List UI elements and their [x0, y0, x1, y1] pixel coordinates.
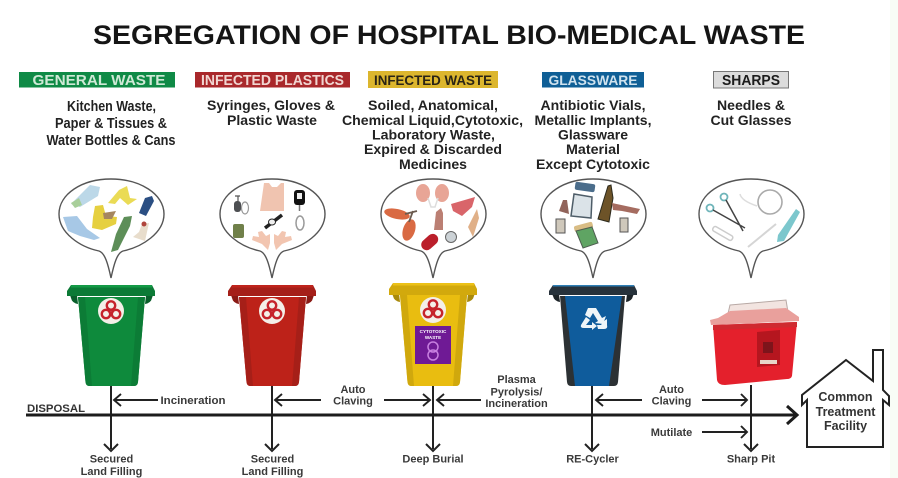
disposal stem: sharp pit [744, 385, 758, 451]
arrow: auto claving between red and yellow: Auto [340, 384, 366, 396]
description: infected waste: Laboratory Waste, [372, 126, 495, 142]
icon: biohazard [424, 300, 442, 317]
description: general waste: Paper & Tissues & [55, 115, 167, 132]
speech bubble: glassware items [541, 179, 646, 278]
label: sharps: SHARPS [722, 73, 780, 89]
arrow: auto claving between blue and sharps: Claving [652, 396, 691, 408]
label: secured land filling [81, 454, 142, 478]
label: infected waste: INFECTED WASTE [374, 72, 492, 88]
description: sharps: Cut Glasses [710, 112, 792, 128]
arrow: plasma pyrolysis incineration: Plasma [497, 374, 537, 386]
column: infected waste [342, 71, 523, 466]
description: sharps: Needles & [717, 97, 785, 113]
description: glassware: Metallic Implants, [534, 112, 652, 128]
disposal stem: re-cycler [585, 386, 599, 451]
speech bubble: anatomical waste items [381, 179, 486, 278]
icon: biohazard [102, 301, 120, 318]
description: glassware [534, 97, 652, 172]
column: infected plastics [195, 72, 350, 478]
cytotoxic waste sign: WASTE [425, 335, 441, 340]
description: glassware: Glassware [558, 126, 628, 142]
description: sharps [710, 97, 792, 128]
label: disposal: DISPOSAL [27, 403, 85, 415]
description: infected plastics: Syringes, Gloves & [207, 97, 335, 113]
disposal stem: deep burial [426, 386, 440, 451]
speech bubble: general waste items [59, 179, 164, 278]
description: glassware: Material [566, 141, 620, 157]
description: infected plastics [207, 97, 335, 128]
arrow: mutilate [651, 426, 747, 439]
sharps container [710, 300, 799, 385]
label: secured land filling [242, 454, 303, 478]
label: secured land filling: Secured [251, 454, 294, 466]
common treatment facility house [802, 350, 889, 447]
label: secured land filling: Land Filling [242, 466, 303, 478]
bin: blue [549, 285, 637, 386]
icon: biohazard [263, 301, 281, 318]
label: secured land filling: Secured [90, 454, 133, 466]
cytotoxic waste sign: CYTOTOXIC [420, 329, 447, 334]
common treatment facility house: Facility [824, 419, 867, 433]
description: infected waste: Medicines [399, 156, 467, 172]
arrow: plasma pyrolysis incineration: Pyrolysis/ [491, 386, 542, 398]
description: general waste [46, 98, 176, 149]
label: general waste: GENERAL WASTE [32, 72, 166, 89]
label: infected plastics: INFECTED PLASTICS [201, 73, 344, 89]
description: infected waste: Chemical Liquid,Cytotoxic, [342, 112, 523, 128]
column: sharps [699, 72, 804, 466]
disposal axis [26, 406, 797, 424]
description: infected waste: Soiled, Anatomical, [368, 97, 498, 113]
arrow: auto claving between red and yellow [275, 384, 430, 408]
description: infected waste: Expired & Discarded [364, 141, 502, 157]
arrow: auto claving between blue and sharps [596, 384, 747, 408]
speech bubble: infected plastic items [220, 179, 325, 278]
description: glassware: Antibiotic Vials, [540, 97, 646, 113]
arrow: plasma pyrolysis incineration [437, 374, 548, 410]
common treatment facility house: Common [818, 390, 873, 404]
bin: green [67, 285, 155, 386]
column: glassware [534, 72, 652, 466]
description: general waste: Water Bottles & Cans [46, 132, 176, 149]
disposal stem: secured land filling [104, 386, 118, 451]
arrow: mutilate: Mutilate [651, 427, 692, 439]
description: infected plastics: Plastic Waste [227, 112, 317, 128]
disposal stem: secured land filling [265, 386, 279, 451]
label: sharp pit: Sharp Pit [727, 454, 775, 466]
common treatment facility house: Treatment [816, 405, 876, 419]
icon: recycle [581, 308, 607, 330]
bin: red [228, 285, 316, 386]
arrow: auto claving between blue and sharps: Auto [659, 384, 684, 396]
description: infected waste [342, 97, 523, 172]
label: re-cycler: RE-Cycler [566, 454, 620, 466]
description: general waste: Kitchen Waste, [67, 98, 156, 115]
arrow: plasma pyrolysis incineration: Incineration [485, 398, 548, 410]
bin: yellow [389, 283, 477, 386]
cytotoxic waste sign [415, 326, 451, 364]
title: SEGREGATION OF HOSPITAL BIO-MEDICAL WASTE [93, 20, 805, 50]
label: glassware: GLASSWARE [548, 72, 638, 88]
label: secured land filling: Land Filling [81, 466, 142, 478]
column: general waste [19, 72, 176, 478]
arrow: auto claving between red and yellow: Claving [333, 396, 373, 408]
speech bubble: sharps items [699, 179, 804, 278]
description: glassware: Except Cytotoxic [536, 156, 650, 172]
arrow: incineration [114, 394, 226, 407]
arrow: incineration: Incineration [160, 395, 226, 407]
label: deep burial: Deep Burial [402, 454, 464, 466]
